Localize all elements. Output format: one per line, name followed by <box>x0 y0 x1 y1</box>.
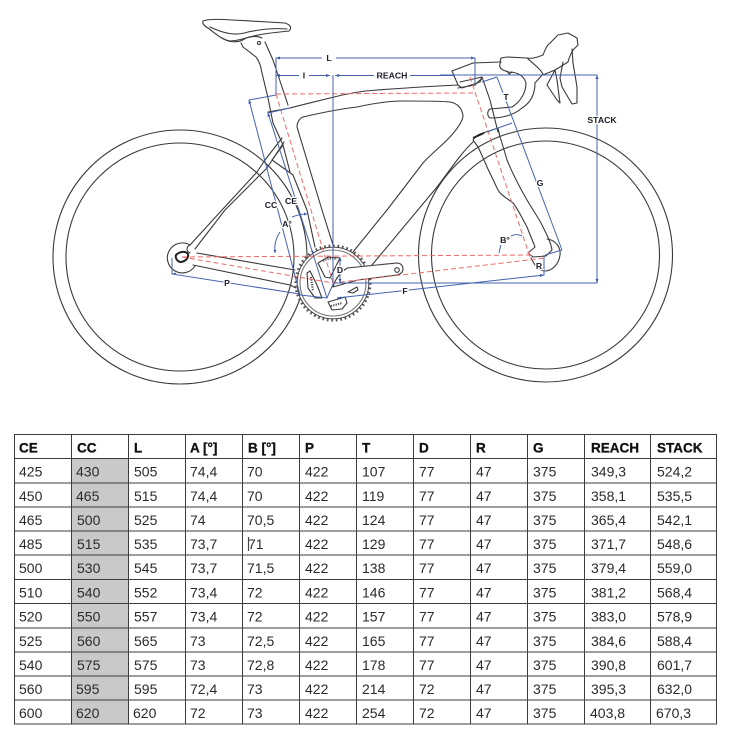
row 5: 73,7 <box>190 560 217 576</box>
row 6: 422 <box>305 584 329 600</box>
row 1: 430 <box>76 464 100 480</box>
row 10: 422 <box>305 681 329 697</box>
row 1: 375 <box>533 464 557 480</box>
row 7: 73,4 <box>190 608 217 624</box>
row 9: 72,8 <box>247 657 274 673</box>
row 7: 72 <box>247 608 263 624</box>
row 3: 542,1 <box>657 512 692 528</box>
row 6: 47 <box>476 584 492 600</box>
row 1: 425 <box>19 464 43 480</box>
icon: crankset <box>296 246 403 320</box>
icon: bike frame <box>187 77 498 288</box>
row 1: 47 <box>476 464 492 480</box>
row 8: 375 <box>533 633 557 649</box>
dimension labels: REACH <box>377 70 407 80</box>
row 11: 72 <box>190 705 206 721</box>
row 11: 73 <box>247 705 263 721</box>
row 10: 595 <box>134 681 158 697</box>
row 6: 73,4 <box>190 584 217 600</box>
row 11: 254 <box>362 705 386 721</box>
table header: D <box>419 440 429 456</box>
row 11: 403,8 <box>590 705 625 721</box>
table header: T <box>362 440 371 456</box>
row 8: 525 <box>19 633 43 649</box>
row 5: 379,4 <box>591 560 626 576</box>
dimension arrowheads <box>172 56 598 300</box>
row 9: 575 <box>134 657 158 673</box>
row 10: 214 <box>362 681 386 697</box>
row 2: 535,5 <box>657 488 692 504</box>
row 4: 422 <box>305 536 329 552</box>
row 7: 422 <box>305 608 329 624</box>
table header: CC <box>77 440 97 456</box>
row 10: 560 <box>19 681 43 697</box>
icon: rear wheel <box>53 130 307 384</box>
icon: stem and handlebar <box>452 57 543 118</box>
row 9: 375 <box>533 657 557 673</box>
row 11: 620 <box>133 705 157 721</box>
row 7: 383,0 <box>591 608 626 624</box>
dimension labels: CC <box>265 200 278 210</box>
row 5: 77 <box>419 560 435 576</box>
row 3: 77 <box>419 512 435 528</box>
row 10: 595 <box>76 681 100 697</box>
row 5: 71,5 <box>247 560 274 576</box>
icon: fork <box>473 128 560 271</box>
row 4: 375 <box>533 536 557 552</box>
row 4: 77 <box>419 536 435 552</box>
row 2: 515 <box>134 488 158 504</box>
row 9: 77 <box>419 657 435 673</box>
dimension labels: D <box>337 265 343 275</box>
row 8: 422 <box>305 633 329 649</box>
row 3: 47 <box>476 512 492 528</box>
row 6: 568,4 <box>657 584 692 600</box>
row 4: 47 <box>476 536 492 552</box>
row 8: 565 <box>134 633 158 649</box>
row 8: 73 <box>190 633 206 649</box>
red dashed geometry lines <box>182 77 545 283</box>
dimension labels: R <box>536 261 543 271</box>
row 5: 138 <box>362 560 386 576</box>
row 1: 349,3 <box>591 464 626 480</box>
row 4: 485 <box>19 536 43 552</box>
row 11: 620 <box>76 705 100 721</box>
row 8: 77 <box>419 633 435 649</box>
table header: G <box>533 440 544 456</box>
table header: STACK <box>657 440 703 456</box>
geometry table <box>14 434 717 724</box>
dimension labels <box>224 53 617 296</box>
row 6: 77 <box>419 584 435 600</box>
row 2: 119 <box>362 488 385 504</box>
table header: A [°] <box>190 440 217 456</box>
row 5: 530 <box>77 560 101 576</box>
row 2: 70 <box>247 488 263 504</box>
row 3: 465 <box>19 512 43 528</box>
row 3: 124 <box>362 512 386 528</box>
row 7: 550 <box>77 608 101 624</box>
row 3: 70,5 <box>247 512 274 528</box>
icon: rear hub <box>167 243 195 273</box>
row 11: 72 <box>419 705 435 721</box>
row 5: 545 <box>134 560 158 576</box>
row 1: 422 <box>305 464 329 480</box>
row 9: 47 <box>476 657 492 673</box>
row 5: 559,0 <box>657 560 692 576</box>
row 4: 548,6 <box>657 536 692 552</box>
row 11: 422 <box>305 705 329 721</box>
row 2: 74,4 <box>190 488 217 504</box>
row 8: 165 <box>362 633 386 649</box>
row 3: 500 <box>77 512 101 528</box>
row 8: 560 <box>77 633 101 649</box>
row 2: 450 <box>19 488 43 504</box>
row 7: 557 <box>134 608 158 624</box>
row 9: 73 <box>190 657 206 673</box>
row 6: 146 <box>362 584 386 600</box>
table header: L <box>134 440 142 456</box>
row 9: 540 <box>19 657 43 673</box>
row 4: 73,7 <box>190 536 217 552</box>
row 2: 77 <box>419 488 435 504</box>
row 7: 157 <box>362 608 386 624</box>
row 5: 422 <box>305 560 329 576</box>
dimension labels: A° <box>282 219 292 229</box>
row 4: 535 <box>134 536 158 552</box>
row 2: 422 <box>305 488 329 504</box>
dimension labels: T <box>503 92 509 102</box>
row 7: 520 <box>19 608 43 624</box>
row 6: 375 <box>533 584 557 600</box>
row 3: 422 <box>305 512 329 528</box>
row 1: 74,4 <box>190 464 217 480</box>
table header: P <box>305 440 314 456</box>
row 10: 395,3 <box>591 681 626 697</box>
row 6: 510 <box>19 584 43 600</box>
row 5: 47 <box>476 560 492 576</box>
blue dimension lines <box>172 58 597 298</box>
icon: brake lever <box>527 33 578 104</box>
row 9: 575 <box>77 657 101 673</box>
row 10: 47 <box>476 681 492 697</box>
table header: REACH <box>591 440 639 456</box>
dimension labels: P <box>224 278 230 288</box>
highlighted CC column <box>71 458 128 724</box>
row 7: 47 <box>476 608 492 624</box>
row 6: 72 <box>247 584 263 600</box>
row 11: 670,3 <box>656 705 691 721</box>
row 6: 552 <box>134 584 158 600</box>
dimension labels: F <box>402 286 408 296</box>
row 9: 422 <box>305 657 329 673</box>
row 3: 74 <box>190 512 206 528</box>
row 5: 375 <box>533 560 557 576</box>
text cursor mark <box>248 537 250 551</box>
row 1: 77 <box>419 464 435 480</box>
icon: front wheel <box>418 128 672 382</box>
row 10: 72,4 <box>190 681 217 697</box>
row 8: 72,5 <box>247 633 274 649</box>
row 3: 365,4 <box>591 512 626 528</box>
dimension labels: STACK <box>587 115 617 125</box>
row 4: 129 <box>362 536 386 552</box>
row 1: 505 <box>134 464 158 480</box>
row 9: 178 <box>362 657 386 673</box>
dimension labels: B° <box>500 235 510 245</box>
row 3: 525 <box>134 512 158 528</box>
row 1: 524,2 <box>657 464 692 480</box>
row 6: 540 <box>77 584 101 600</box>
row 10: 73 <box>247 681 263 697</box>
table grid <box>14 434 717 724</box>
row 7: 77 <box>419 608 435 624</box>
row 10: 72 <box>419 681 435 697</box>
row 1: 70 <box>247 464 263 480</box>
row 2: 465 <box>76 488 100 504</box>
table header: B [°] <box>248 440 276 456</box>
row 2: 375 <box>533 488 557 504</box>
row 8: 588,4 <box>657 633 692 649</box>
row 8: 384,6 <box>591 633 626 649</box>
table header: R <box>476 440 486 456</box>
row 2: 47 <box>476 488 492 504</box>
dimension labels: L <box>326 53 332 63</box>
bike geometry diagram <box>53 19 672 384</box>
dimension labels: G <box>537 178 544 188</box>
row 5: 500 <box>19 560 43 576</box>
dimension labels: I <box>303 70 305 80</box>
table header: CE <box>19 440 38 456</box>
row 6: 381,2 <box>591 584 626 600</box>
row 10: 632,0 <box>657 681 692 697</box>
row 9: 601,7 <box>657 657 692 673</box>
dimension labels: CE <box>285 196 297 206</box>
row 4: 371,7 <box>591 536 626 552</box>
icon: saddle and seatpost <box>203 19 291 105</box>
row 11: 375 <box>533 705 557 721</box>
row 3: 375 <box>533 512 557 528</box>
row 2: 358,1 <box>591 488 626 504</box>
row 1: 107 <box>362 464 386 480</box>
row 11: 600 <box>19 705 43 721</box>
row 4: 515 <box>77 536 101 552</box>
row 11: 47 <box>476 705 492 721</box>
row 9: 390,8 <box>591 657 626 673</box>
row 4: 71 <box>248 536 264 552</box>
row 7: 375 <box>533 608 557 624</box>
row 8: 47 <box>476 633 492 649</box>
row 10: 375 <box>533 681 557 697</box>
row 7: 578,9 <box>657 608 692 624</box>
